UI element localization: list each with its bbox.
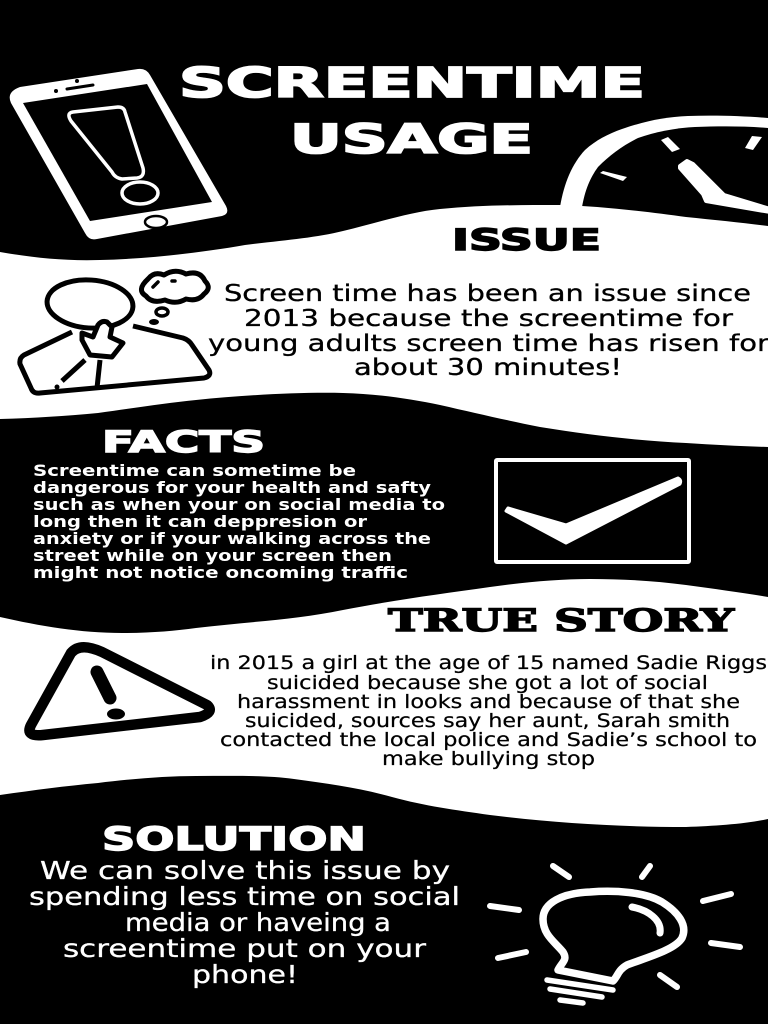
text: facts body: dangerous for your health and safty <box>33 478 432 497</box>
icon: phone with exclamation mark <box>10 69 227 239</box>
text: true story body: harassment in looks and because of that she <box>237 691 740 713</box>
text: facts body <box>33 461 445 582</box>
text: solution body: spending less time on social <box>29 882 460 911</box>
icon: clock <box>560 116 768 240</box>
heading: issue: ISSUE <box>452 223 601 257</box>
text: facts body: anxiety or if your walking across the <box>33 529 431 548</box>
panel: true story <box>0 579 768 830</box>
text: facts body: long then it can deppresion or <box>33 512 367 531</box>
panel: solution <box>0 776 768 1024</box>
title: SCREENTIME <box>179 59 645 107</box>
text: facts body: Screentime can sometime be <box>33 461 356 480</box>
text: facts body: street while on your screen then <box>33 546 392 565</box>
panel: facts <box>0 393 768 633</box>
text: true story body <box>210 652 767 770</box>
heading: solution: SOLUTION <box>102 820 366 858</box>
text: issue body: young adults screen time has risen for <box>208 331 768 357</box>
text: facts body: might not notice oncoming traffic <box>33 563 408 582</box>
heading: true story: TRUE STORY <box>388 603 735 639</box>
text: true story body: in 2015 a girl at the age of 15 named Sadie Riggs <box>210 652 767 674</box>
text: facts body: such as when your on social media to <box>33 495 445 514</box>
text: true story body: suicided, sources say her aunt, Sarah smith <box>245 710 730 732</box>
icon: light bulb <box>490 866 740 1003</box>
title <box>179 59 645 163</box>
icon: warning triangle <box>30 647 210 735</box>
text: true story body: make bullying stop <box>382 748 595 770</box>
heading: facts: FACTS <box>102 425 265 459</box>
panel: header <box>0 0 768 300</box>
text: solution body: phone! <box>192 960 298 989</box>
title: USAGE <box>290 117 533 163</box>
text: issue body <box>208 281 768 381</box>
text: issue body: Screen time has been an issue since <box>224 281 751 307</box>
icon: person thinking <box>20 271 210 393</box>
panel: issue <box>0 205 768 450</box>
text: issue body: about 30 minutes! <box>354 355 622 381</box>
text: solution body <box>29 856 460 989</box>
text: issue body: 2013 because the screentime for <box>244 306 734 332</box>
text: solution body: We can solve this issue by <box>40 856 450 885</box>
text: true story body: suicided because she got a lot of social <box>267 672 708 694</box>
text: solution body: media or haveing a <box>125 908 391 937</box>
icon: check mark in box <box>496 460 689 562</box>
text: solution body: screentime put on your <box>63 934 427 963</box>
text: true story body: contacted the local police and Sadie’s school to <box>220 729 757 751</box>
